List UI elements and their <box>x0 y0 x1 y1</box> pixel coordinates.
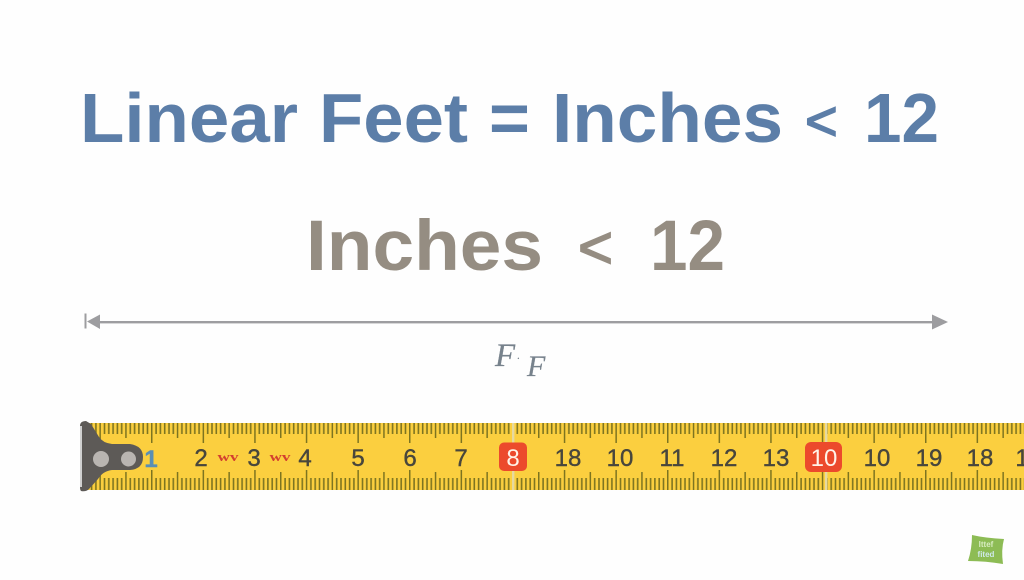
metal end hook <box>80 421 143 491</box>
tape numbers: 11 <box>660 445 684 472</box>
tape numbers: 3 <box>247 445 261 472</box>
tape numbers: 4 <box>298 445 312 472</box>
subtitle: Inches < 12: < <box>578 214 613 281</box>
subtitle: Inches < 12 <box>306 207 725 286</box>
tape numbers: 1 <box>144 446 158 473</box>
tape numbers: 10 <box>607 445 633 472</box>
tape numbers: 6 <box>403 445 417 472</box>
logo badge: Ittef <box>979 540 994 549</box>
title: Linear Feet = Inches < 12: Feet <box>319 79 468 157</box>
tape measure <box>80 421 1024 491</box>
title: Linear Feet = Inches < 12: = <box>489 79 530 157</box>
red badge: 10 <box>805 423 842 490</box>
title: Linear Feet = Inches < 12: 12 <box>864 79 939 157</box>
tape numbers <box>144 445 1024 473</box>
dimension label: F . F: · <box>517 354 520 365</box>
tape numbers: 18 <box>967 445 993 472</box>
red small marks <box>218 449 291 464</box>
title: Linear Feet = Inches < 12 <box>80 79 939 157</box>
dimension label: F . F: F <box>526 350 546 383</box>
subtitle: Inches < 12: Inches <box>306 207 543 286</box>
bottom ruler ticks <box>84 460 1024 490</box>
tape numbers: 7 <box>454 445 468 472</box>
dimension label: F . F: F <box>494 338 516 374</box>
logo badge <box>968 535 1004 564</box>
tape numbers: 10 <box>864 445 890 472</box>
title: Linear Feet = Inches < 12: < <box>805 89 838 152</box>
red badge: 10: 10 <box>811 445 837 472</box>
title: Linear Feet = Inches < 12: Inches <box>552 79 783 157</box>
tape numbers: 18 <box>555 445 581 472</box>
tape body <box>84 423 1024 490</box>
tape numbers: 12 <box>711 445 737 472</box>
dimension label: F . F <box>494 338 546 383</box>
tape numbers: 13 <box>763 445 789 472</box>
subtitle: Inches < 12: 12 <box>650 207 725 286</box>
red badge: 8 <box>499 423 527 490</box>
logo badge: fited <box>978 550 995 559</box>
title: Linear Feet = Inches < 12: Linear <box>80 79 298 157</box>
tape numbers: 19 <box>916 445 942 472</box>
tape numbers: 5 <box>351 445 365 472</box>
top ruler ticks <box>84 423 1024 453</box>
arrow: dimension line <box>84 314 948 330</box>
red small marks: wv <box>218 449 239 464</box>
tape numbers: 2 <box>194 445 208 472</box>
red small marks: wv <box>270 449 291 464</box>
red badge: 8: 8 <box>506 445 520 472</box>
